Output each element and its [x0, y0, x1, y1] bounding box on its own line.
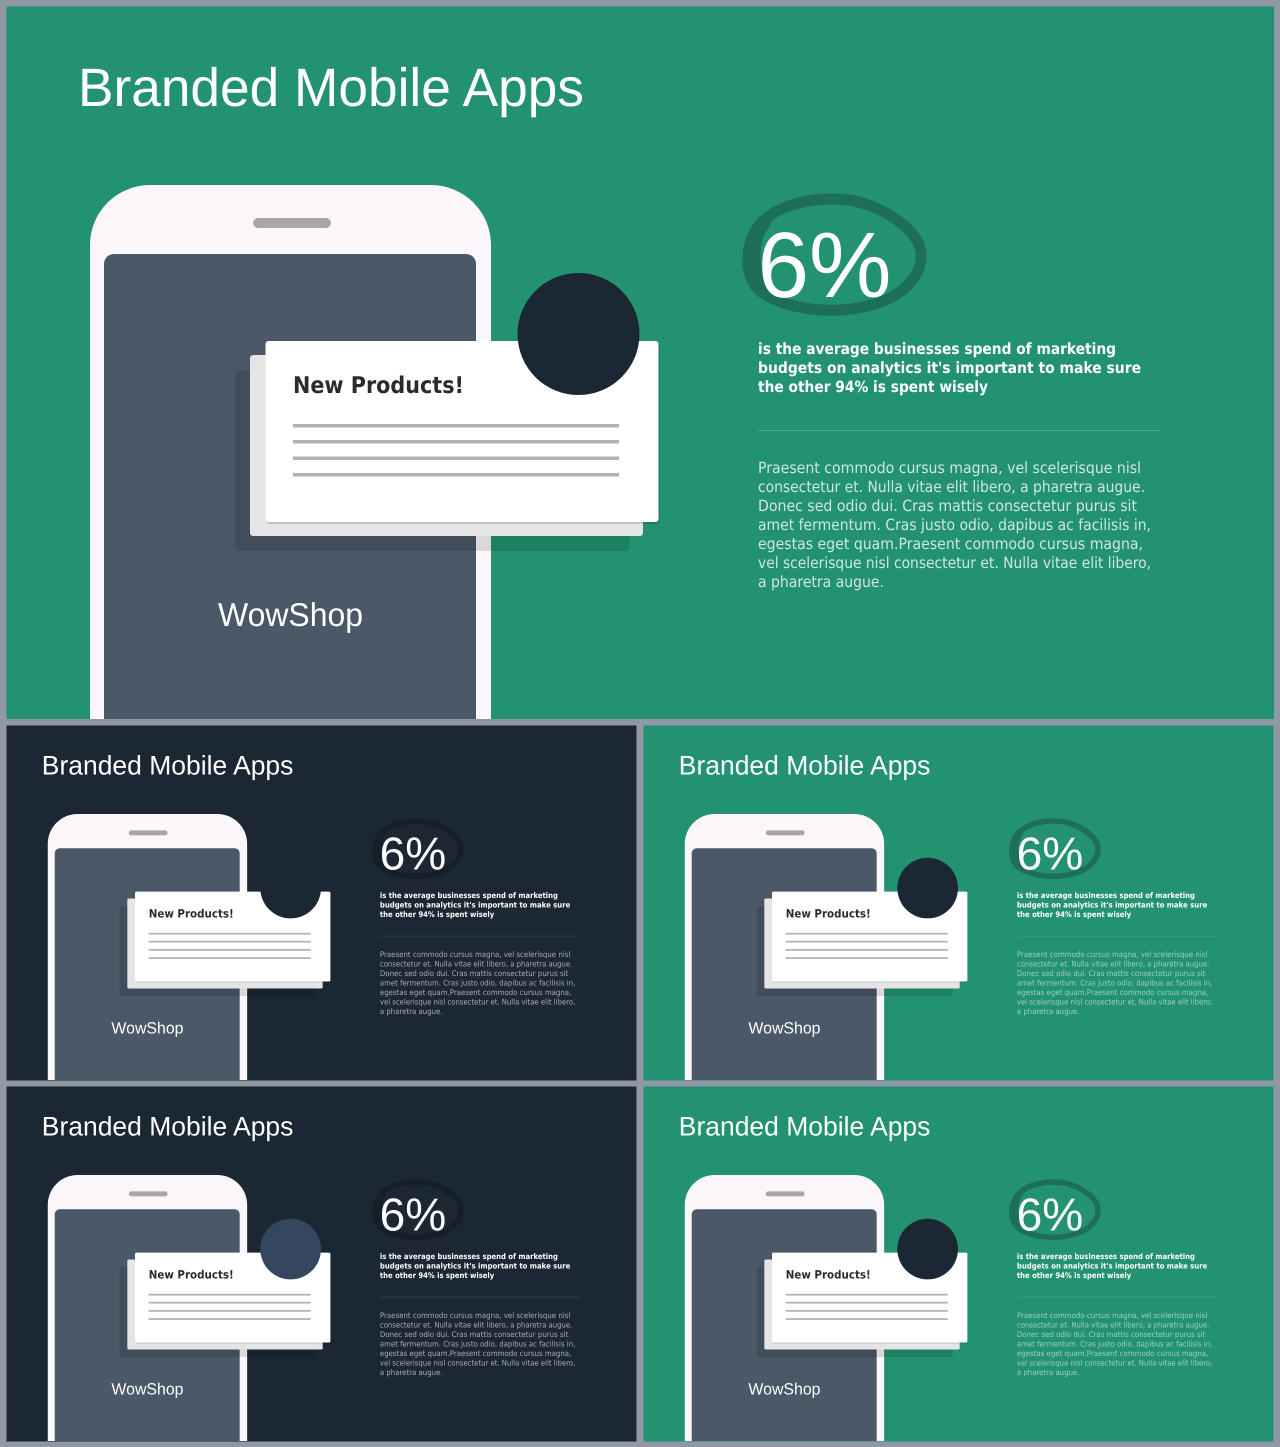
phone body: [685, 814, 884, 1080]
bold stat description: [380, 1252, 570, 1280]
hand-drawn ring: [748, 199, 921, 310]
body paragraph: a pharetra augue.: [380, 1368, 443, 1377]
phone speaker: [253, 218, 331, 228]
bold stat description: the other 94% is spent wisely: [380, 910, 494, 919]
body paragraph: [1017, 1311, 1212, 1377]
body paragraph: amet fermentum. Cras justo odio, dapibus ac facilisis in,: [1017, 979, 1212, 988]
app name: WowShop: [218, 596, 363, 633]
notification badge circle: [518, 273, 640, 395]
hand-drawn ring: [375, 821, 461, 876]
body paragraph: vel scelerisque nisl consectetur et. Nulla vitae elit libero,: [758, 554, 1151, 572]
panel: dark slide, top left: [7, 726, 636, 1081]
bold stat description: budgets on analytics it's important to make sure: [380, 1262, 570, 1270]
phone screen: [55, 848, 240, 1080]
back card: [250, 355, 643, 536]
phone speaker: [129, 1191, 168, 1196]
panel background: [644, 726, 1273, 1081]
phone illustration: [90, 185, 491, 719]
notification badge circle: [260, 858, 321, 918]
title: Branded Mobile Apps: [78, 58, 584, 118]
body paragraph: vel scelerisque nisl consectetur et. Nulla vitae elit libero,: [380, 1358, 575, 1367]
bold stat description: budgets on analytics it's important to make sure: [1017, 1262, 1207, 1270]
6% figure: 6%: [1017, 828, 1083, 880]
title: Branded Mobile Apps: [42, 751, 293, 781]
card shadow: [757, 1267, 953, 1357]
phone body: [48, 814, 247, 1080]
bold stat description: budgets on analytics it's important to make sure: [380, 901, 570, 909]
card shadow: [120, 906, 316, 996]
body paragraph: Praesent commodo cursus magna, vel scelerisque nisl: [758, 459, 1141, 477]
phone screen: [692, 848, 877, 1080]
notification badge circle: [897, 1219, 958, 1279]
body paragraph: a pharetra augue.: [1017, 1007, 1080, 1016]
phone speaker: [766, 830, 805, 835]
body paragraph: [758, 459, 1151, 591]
back card: [764, 1260, 960, 1350]
panel: main green slide: [6, 6, 1274, 719]
hand-drawn ring: [375, 1182, 461, 1237]
card text lines: [149, 933, 311, 959]
body paragraph: a pharetra augue.: [1017, 1368, 1080, 1377]
bold stat description: the other 94% is spent wisely: [380, 1271, 494, 1280]
body paragraph: egestas eget quam.Praesent commodo cursus magna,: [758, 535, 1143, 553]
front card: [772, 1253, 967, 1343]
app name: WowShop: [748, 1379, 821, 1398]
front card: [266, 341, 658, 522]
hand-drawn ring: [1012, 1182, 1098, 1237]
phone body: [685, 1175, 884, 1441]
phone screen: [104, 254, 476, 719]
bold stat description: budgets on analytics it's important to make sure: [1017, 901, 1207, 909]
app name: WowShop: [748, 1018, 821, 1037]
notification card: [235, 273, 660, 551]
body paragraph: Praesent commodo cursus magna, vel scelerisque nisl: [380, 950, 570, 959]
body paragraph: egestas eget quam.Praesent commodo cursus magna,: [380, 1349, 571, 1358]
body paragraph: amet fermentum. Cras justo odio, dapibus ac facilisis in,: [1017, 1340, 1212, 1349]
phone speaker: [766, 1191, 805, 1196]
card text lines: [293, 424, 619, 476]
body paragraph: [380, 950, 575, 1016]
bold stat description: [758, 340, 1141, 396]
card shadow: [235, 370, 629, 551]
bold stat description: is the average businesses spend of marketing: [380, 891, 558, 900]
phone screen: [55, 1209, 240, 1441]
panel: green slide, bottom right: [644, 1087, 1273, 1442]
panel background: [644, 1087, 1273, 1442]
body paragraph: amet fermentum. Cras justo odio, dapibus ac facilisis in,: [380, 1340, 575, 1349]
bold stat description: is the average businesses spend of marketing: [1017, 891, 1195, 900]
body paragraph: consectetur et. Nulla vitae elit libero, a pharetra augue.: [380, 1321, 572, 1330]
phone illustration: [685, 814, 884, 1080]
bold stat description: [1017, 891, 1207, 919]
body paragraph: amet fermentum. Cras justo odio, dapibus ac facilisis in,: [758, 516, 1151, 534]
bold stat description: is the average businesses spend of marketing: [758, 340, 1116, 358]
body paragraph: a pharetra augue.: [380, 1007, 443, 1016]
phone body: [48, 1175, 247, 1441]
body paragraph: [1017, 950, 1212, 1016]
bold stat description: the other 94% is spent wisely: [1017, 910, 1131, 919]
bold stat description: is the average businesses spend of marketing: [1017, 1252, 1195, 1261]
notification card: [757, 858, 968, 996]
phone speaker: [129, 830, 168, 835]
bold stat description: [380, 891, 570, 919]
back card: [764, 899, 960, 989]
body paragraph: Donec sed odio dui. Cras mattis consectetur purus sit: [1017, 1330, 1205, 1339]
bold stat description: budgets on analytics it's important to make sure: [758, 359, 1141, 377]
card text lines: [149, 1294, 311, 1320]
back card: [127, 1260, 323, 1350]
title: Branded Mobile Apps: [679, 1112, 930, 1142]
back card: [127, 899, 323, 989]
6% figure: 6%: [380, 828, 446, 880]
card heading: New Products!: [786, 1268, 871, 1281]
panel background: [6, 6, 1274, 719]
bold stat description: the other 94% is spent wisely: [1017, 1271, 1131, 1280]
body paragraph: Praesent commodo cursus magna, vel scelerisque nisl: [1017, 1311, 1207, 1320]
body paragraph: Donec sed odio dui. Cras mattis consectetur purus sit: [1017, 969, 1205, 978]
6% figure: 6%: [1017, 1189, 1083, 1241]
body paragraph: consectetur et. Nulla vitae elit libero, a pharetra augue.: [380, 960, 572, 969]
card shadow: [120, 1267, 316, 1357]
body paragraph: vel scelerisque nisl consectetur et. Nulla vitae elit libero,: [380, 997, 575, 1006]
card shadow: [757, 906, 953, 996]
front card: [135, 892, 330, 982]
phone illustration: [685, 1175, 884, 1441]
body paragraph: egestas eget quam.Praesent commodo cursus magna,: [1017, 1349, 1208, 1358]
6% figure: 6%: [758, 213, 892, 317]
notification card: [120, 858, 331, 996]
title: Branded Mobile Apps: [42, 1112, 293, 1142]
body paragraph: a pharetra augue.: [758, 573, 884, 591]
title: Branded Mobile Apps: [679, 751, 930, 781]
body paragraph: Donec sed odio dui. Cras mattis consectetur purus sit: [380, 969, 568, 978]
body paragraph: amet fermentum. Cras justo odio, dapibus ac facilisis in,: [380, 979, 575, 988]
card text lines: [786, 1294, 948, 1320]
phone body: [90, 185, 491, 719]
body paragraph: Donec sed odio dui. Cras mattis consectetur purus sit: [758, 497, 1137, 515]
card heading: New Products!: [149, 907, 234, 920]
notification badge circle: [897, 858, 958, 918]
card heading: New Products!: [149, 1268, 234, 1281]
bold stat description: is the average businesses spend of marketing: [380, 1252, 558, 1261]
panel background: [7, 726, 636, 1081]
front card: [135, 1253, 330, 1343]
front card: [772, 892, 967, 982]
body paragraph: Praesent commodo cursus magna, vel scelerisque nisl: [1017, 950, 1207, 959]
body paragraph: consectetur et. Nulla vitae elit libero, a pharetra augue.: [1017, 1321, 1209, 1330]
notification card: [120, 1219, 331, 1357]
body paragraph: Donec sed odio dui. Cras mattis consectetur purus sit: [380, 1330, 568, 1339]
body paragraph: vel scelerisque nisl consectetur et. Nulla vitae elit libero,: [1017, 1358, 1212, 1367]
card text lines: [786, 933, 948, 959]
body paragraph: vel scelerisque nisl consectetur et. Nulla vitae elit libero,: [1017, 997, 1212, 1006]
app name: WowShop: [111, 1379, 184, 1398]
app name: WowShop: [111, 1018, 184, 1037]
notification badge circle: [260, 1219, 321, 1279]
body paragraph: Praesent commodo cursus magna, vel scelerisque nisl: [380, 1311, 570, 1320]
body paragraph: consectetur et. Nulla vitae elit libero, a pharetra augue.: [758, 478, 1145, 496]
hand-drawn ring: [1012, 821, 1098, 876]
panel: green slide, top right: [644, 726, 1273, 1081]
card heading: New Products!: [786, 907, 871, 920]
bold stat description: [1017, 1252, 1207, 1280]
6% figure: 6%: [380, 1189, 446, 1241]
phone screen: [692, 1209, 877, 1441]
body paragraph: [380, 1311, 575, 1377]
phone illustration: [48, 1175, 247, 1441]
card heading: New Products!: [293, 373, 464, 399]
body paragraph: consectetur et. Nulla vitae elit libero, a pharetra augue.: [1017, 960, 1209, 969]
body paragraph: egestas eget quam.Praesent commodo cursus magna,: [1017, 988, 1208, 997]
panel: dark slide, bottom left: [7, 1087, 636, 1442]
bold stat description: the other 94% is spent wisely: [758, 378, 988, 396]
phone illustration: [48, 814, 247, 1080]
panel background: [7, 1087, 636, 1442]
notification card: [757, 1219, 968, 1357]
body paragraph: egestas eget quam.Praesent commodo cursus magna,: [380, 988, 571, 997]
